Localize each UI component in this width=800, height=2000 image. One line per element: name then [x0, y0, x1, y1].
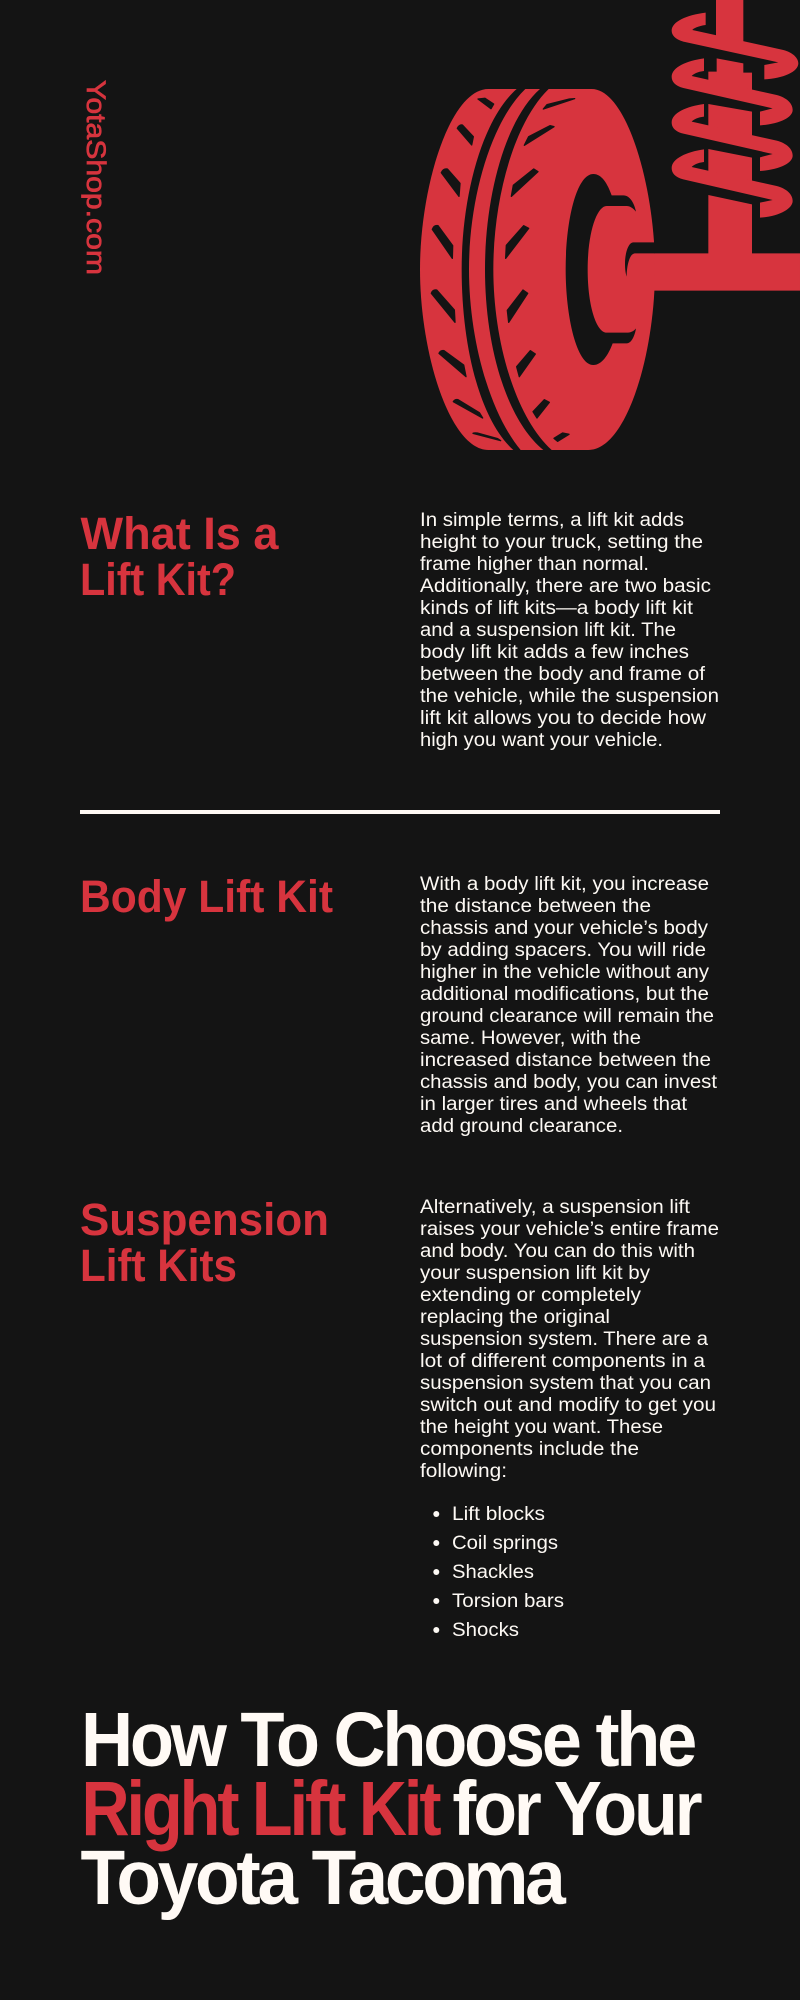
- icon part: axle: [627, 253, 800, 291]
- text block: body lift kit description: chassis and body, you can invest: [420, 1072, 718, 1093]
- heading: What Is a Lift Kit?: What Is a: [80, 508, 279, 559]
- section: Suspension Lift Kits: [80, 1194, 719, 1641]
- text block: lift kit definition: and a suspension lift kit. The: [420, 620, 676, 641]
- list: suspension components: [433, 1504, 564, 1641]
- text block: body lift kit description: [420, 874, 718, 1137]
- icon part: axle joint shadow: [625, 242, 655, 277]
- icon part: tire grooves: [462, 89, 552, 450]
- text block: body lift kit description: chassis and your vehicle’s body: [420, 918, 709, 939]
- list: suspension components: Coil springs: [452, 1533, 558, 1554]
- icon part: tread marks: [431, 98, 575, 441]
- text block: body lift kit description: ground clearance will remain the: [420, 1006, 714, 1027]
- text block: suspension lift description: the height you want. These: [420, 1417, 663, 1438]
- text block: body lift kit description: by adding spacers. You will ride: [420, 940, 706, 961]
- text block: suspension lift description: your suspension lift kit by: [420, 1263, 651, 1284]
- text block: body lift kit description: With a body lift kit, you increase: [420, 874, 709, 895]
- title: Right Lift Kit: [82, 1766, 441, 1852]
- text block: suspension lift description: [420, 1197, 719, 1482]
- text block: lift kit definition: body lift kit adds a few inches: [420, 642, 689, 663]
- list: suspension components: Shocks: [452, 1620, 519, 1641]
- text block: suspension lift description: components include the: [420, 1439, 639, 1460]
- icon part: wheel hub opening: [566, 174, 636, 365]
- text block: lift kit definition: height to your truck, setting the: [420, 532, 703, 553]
- heading: What Is a Lift Kit?: [80, 508, 279, 605]
- section: Body Lift Kit: [80, 871, 718, 1137]
- text block: lift kit definition: Additionally, there are two basic: [420, 576, 711, 597]
- text block: body lift kit description: add ground clearance.: [420, 1116, 623, 1137]
- text block: body lift kit description: additional modifications, but the: [420, 984, 709, 1005]
- list: suspension components: Shackles: [452, 1562, 534, 1583]
- brand: YotaShop.com vertical text: YotaShop.com: [81, 80, 111, 275]
- heading: Body Lift Kit: Body Lift Kit: [80, 871, 333, 922]
- text block: lift kit definition: between the body and frame of: [420, 664, 706, 685]
- text block: suspension lift description: suspension system that you can: [420, 1373, 711, 1394]
- text block: lift kit definition: the vehicle, while the suspension: [420, 686, 719, 707]
- text block: lift kit definition: kinds of lift kits—a body lift kit: [420, 598, 694, 619]
- title: for Your: [452, 1766, 702, 1852]
- icon part: shock rod: [708, 0, 752, 260]
- text block: lift kit definition: high you want your vehicle.: [420, 730, 663, 751]
- text block: suspension lift description: switch out and modify to get you: [420, 1395, 716, 1416]
- text block: body lift kit description: the distance between the: [420, 896, 651, 917]
- heading: Suspension Lift Kits: Suspension: [80, 1194, 329, 1245]
- text block: suspension lift description: raises your vehicle’s entire frame: [420, 1219, 719, 1240]
- heading: Suspension Lift Kits: Lift Kits: [80, 1240, 237, 1291]
- text block: suspension lift description: extending or completely: [420, 1285, 642, 1306]
- text block: suspension lift description: lot of different components in a: [420, 1351, 705, 1372]
- text block: body lift kit description: in larger tires and wheels that: [420, 1094, 688, 1115]
- list: suspension components: Torsion bars: [452, 1591, 564, 1612]
- text block: body lift kit description: higher in the vehicle without any: [420, 962, 710, 983]
- title: [80, 1697, 702, 1921]
- text block: suspension lift description: Alternatively, a suspension lift: [420, 1197, 691, 1218]
- text block: suspension lift description: replacing the original: [420, 1307, 610, 1328]
- text block: body lift kit description: same. However, with the: [420, 1028, 641, 1049]
- title: How To Choose the: [81, 1697, 696, 1783]
- text block: suspension lift description: following:: [420, 1461, 507, 1482]
- text block: suspension lift description: suspension system. There are a: [420, 1329, 708, 1350]
- heading: What Is a Lift Kit?: Lift Kit?: [80, 554, 236, 605]
- icon: tire with suspension coil spring: [420, 0, 800, 450]
- list: suspension components: Lift blocks: [452, 1504, 545, 1525]
- heading: Suspension Lift Kits: [80, 1194, 329, 1291]
- text block: lift kit definition: frame higher than normal.: [420, 554, 649, 575]
- section: What Is a Lift Kit?: [80, 508, 719, 751]
- text block: body lift kit description: increased distance between the: [420, 1050, 711, 1071]
- text block: lift kit definition: [420, 510, 719, 751]
- icon part: tire body: [420, 89, 655, 450]
- icon part: coil spring: [672, 13, 798, 218]
- text block: lift kit definition: lift kit allows you to decide how: [420, 708, 706, 729]
- text block: lift kit definition: In simple terms, a lift kit adds: [420, 510, 684, 531]
- text block: suspension lift description: and body. You can do this with: [420, 1241, 695, 1262]
- title: Toyota Tacoma: [80, 1835, 567, 1921]
